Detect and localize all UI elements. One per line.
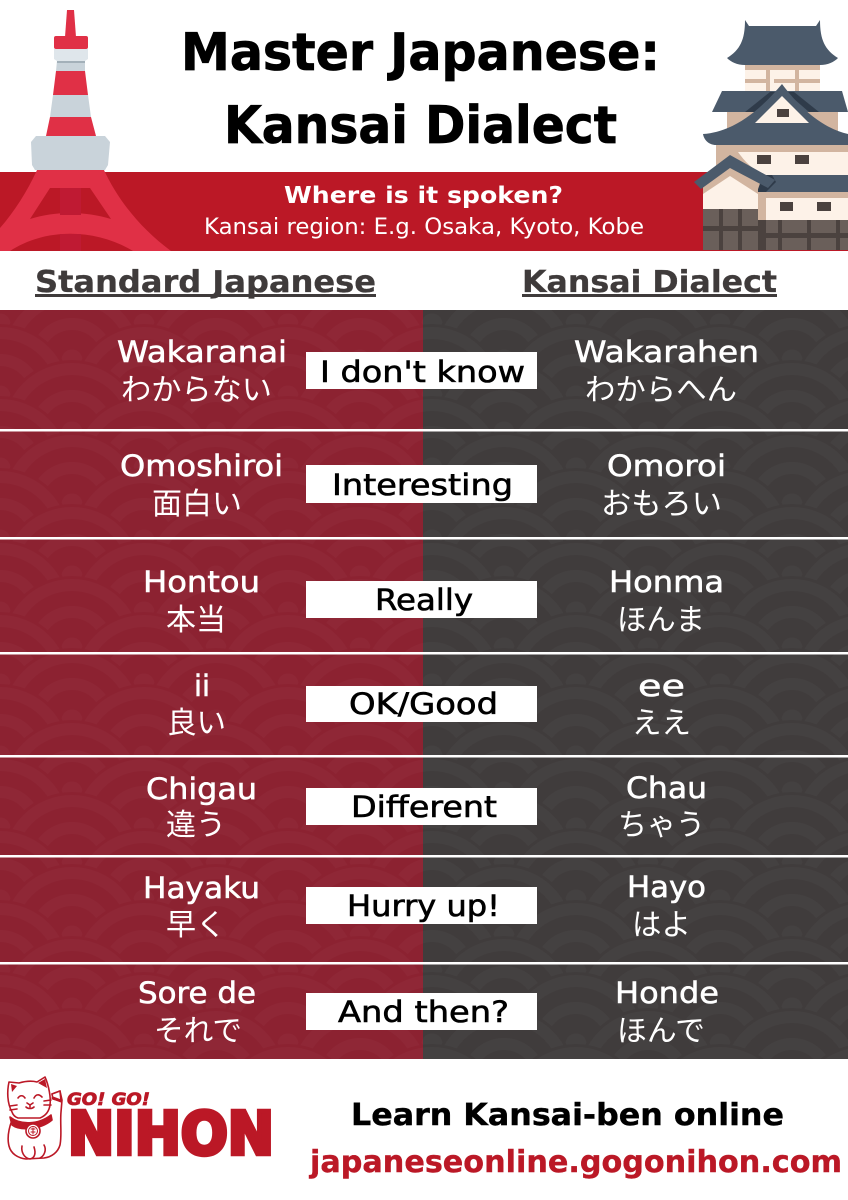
comparison table background [0, 310, 848, 1059]
row: Interesting: Omoshiroi [120, 449, 283, 483]
row: Hurry up!: Hayo [627, 870, 706, 904]
row: OK/Good: ee [638, 669, 685, 703]
row: I don't know [117, 335, 759, 407]
banner text: Kansai region: E.g. Osaka, Kyoto, Kobe [204, 215, 644, 240]
row: Interesting: おもろい [601, 488, 722, 521]
row: Hurry up!: 早く [166, 909, 226, 942]
row: Interesting: Omoroi [607, 449, 726, 483]
logo: Go! Go! Nihon [8, 1077, 274, 1168]
row: Hurry up!: はよ [632, 909, 691, 942]
row: I don't know: I don't know [320, 355, 525, 389]
row: OK/Good [167, 669, 691, 740]
icon: lucky cat [8, 1077, 62, 1159]
logo text: Go! Go!: GO! GO! [67, 1090, 150, 1110]
row: I don't know: わからない [121, 374, 272, 407]
row: Interesting [120, 449, 726, 521]
icon: Tokyo tower [0, 10, 171, 251]
row: I don't know: Wakaranai [117, 335, 287, 369]
row: And then?: Sore de [138, 976, 256, 1010]
row: OK/Good: ええ [632, 707, 691, 740]
row: Different: Different [351, 790, 497, 824]
row: Really [143, 565, 724, 637]
banner: where is it spoken [0, 172, 848, 251]
row: Really: Really [375, 583, 473, 617]
row: OK/Good: 良い [167, 707, 226, 740]
icon: Japanese castle [694, 20, 848, 250]
column heading: Standard Japanese: Standard Japanese [35, 265, 376, 300]
row: OK/Good: ii [194, 669, 210, 703]
title [181, 23, 660, 156]
column heading: Kansai Dialect: Kansai Dialect [522, 265, 777, 300]
logo text: Nihon: NIHON [68, 1099, 274, 1168]
row: I don't know: Wakarahen [574, 335, 759, 369]
call to action: Learn Kansai-ben online [351, 1098, 784, 1133]
row: And then?: それで [154, 1015, 242, 1048]
row: OK/Good: OK/Good [349, 687, 498, 721]
row: Hurry up! [143, 870, 706, 942]
row: And then?: ほんで [617, 1015, 705, 1048]
row: Interesting: 面白い [152, 488, 242, 521]
row: Hurry up!: Hurry up! [347, 889, 500, 923]
row: I don't know: わからへん [585, 374, 737, 407]
row: Different: Chigau [146, 772, 257, 806]
row: And then?: Honde [615, 976, 719, 1010]
title: Kansai Dialect [224, 96, 617, 156]
row: Different: Chau [626, 771, 707, 805]
row: Different: 違う [166, 809, 226, 842]
row: And then? [138, 976, 719, 1048]
row: Hurry up!: Hayaku [143, 871, 260, 905]
banner heading: Where is it spoken? [284, 183, 563, 209]
row: Interesting: Interesting [332, 468, 513, 502]
row: Really: Hontou [143, 565, 260, 599]
row: And then?: And then? [338, 995, 509, 1029]
row: Really: Honma [609, 565, 724, 599]
title: Master Japanese: [181, 23, 660, 83]
website link: japaneseonline.gogonihon.com [309, 1145, 842, 1180]
row: Different [146, 771, 707, 842]
row: Really: ほんま [617, 604, 705, 637]
row: Different: ちゃう [618, 809, 705, 842]
row: Really: 本当 [166, 604, 226, 637]
